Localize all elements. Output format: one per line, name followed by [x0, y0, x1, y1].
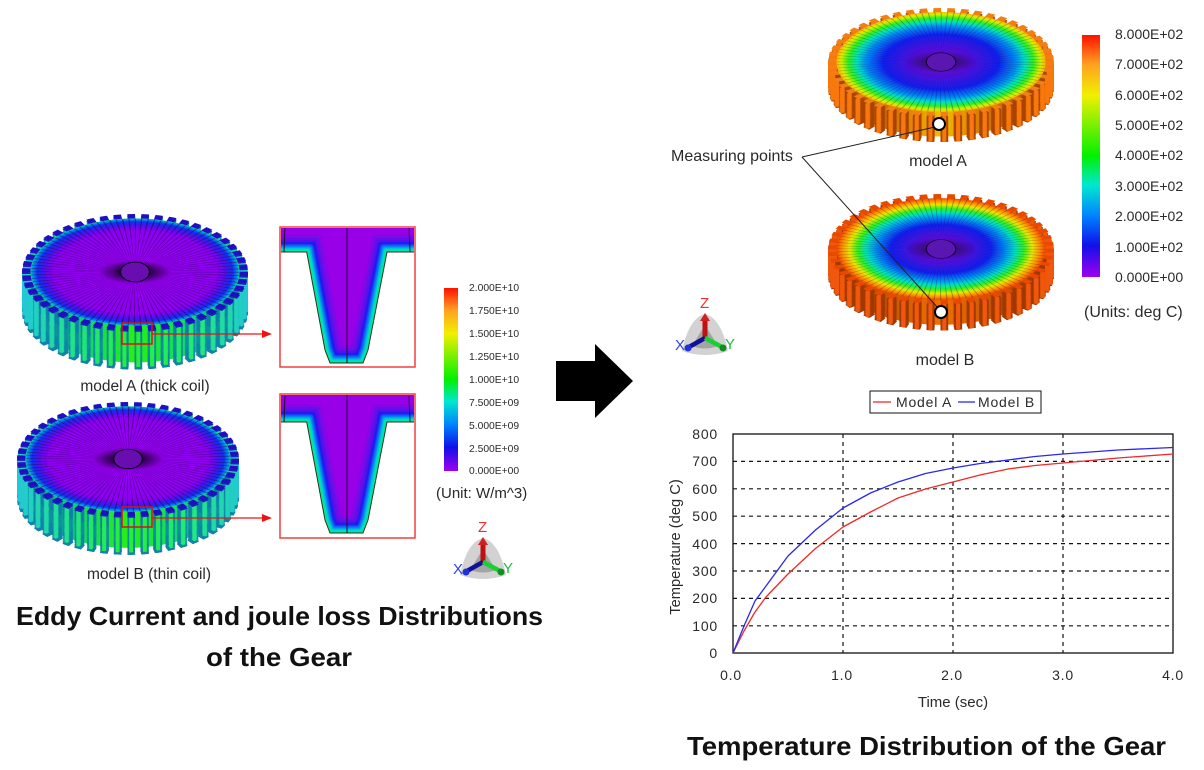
colour legend: joule loss: [436, 283, 527, 502]
colour legend: temperature: 1.000E+02: [1115, 239, 1183, 255]
curve: model B: [733, 448, 1173, 653]
detail panel: tooth model A: [279, 226, 416, 368]
y axis labels: 700: [692, 453, 718, 469]
x axis labels: 3.0: [1052, 667, 1074, 683]
measuring points callout: [671, 118, 947, 318]
y axis labels: 600: [692, 481, 718, 497]
label: model B: model B: [916, 352, 974, 369]
colour legend: joule loss: 1.250E+10: [469, 352, 519, 363]
label: model B thin coil: model B (thin coil): [87, 566, 211, 583]
colour legend: joule loss: 5.000E+09: [469, 421, 519, 432]
measuring points callout: Measuring points: [671, 148, 793, 165]
colour legend: temperature: 6.000E+02: [1115, 87, 1183, 103]
title: eddy current: of the Gear: [206, 642, 352, 672]
x axis labels: 0.0: [720, 667, 742, 683]
gear: model A temperature: [830, 10, 1052, 141]
chart legend: Model B: [978, 394, 1035, 410]
y axis labels: 300: [692, 563, 718, 579]
highlight box and arrow: model B: [122, 507, 272, 527]
x axis labels: 1.0: [831, 667, 853, 683]
colour legend: temperature: 5.000E+02: [1115, 117, 1183, 133]
axis triad: left: [453, 519, 513, 579]
title: eddy current: [16, 601, 543, 672]
detail panel: tooth model B: [279, 393, 416, 539]
colour legend: temperature: 2.000E+02: [1115, 208, 1183, 224]
chart legend: [870, 391, 1041, 413]
y axis labels: 200: [692, 590, 718, 606]
x axis labels: 4.0: [1162, 667, 1184, 683]
y axis labels: [692, 426, 718, 661]
colour legend: temperature: 4.000E+02: [1115, 147, 1183, 163]
colour legend: temperature: 7.000E+02: [1115, 56, 1183, 72]
gear: model B eddy current: [19, 404, 237, 552]
gear: model B temperature: [830, 196, 1052, 329]
colour legend: joule loss: (Unit: W/m^3): [436, 485, 527, 502]
label: model A: model A: [909, 153, 967, 170]
arrow: big black: [556, 344, 633, 418]
y axis labels: 500: [692, 508, 718, 524]
gear: model A eddy current: [24, 216, 246, 367]
colour legend: temperature: 8.000E+02: [1115, 26, 1183, 42]
y axis labels: 100: [692, 618, 718, 634]
line chart: temperature vs time: [668, 426, 1184, 711]
y axis labels: 800: [692, 426, 718, 442]
colour legend: joule loss: 2.000E+10: [469, 283, 519, 294]
colour legend: temperature: 0.000E+00: [1115, 269, 1183, 285]
colour legend: joule loss: 1.000E+10: [469, 375, 519, 386]
label: model A thick coil: model A (thick coil): [80, 378, 210, 395]
x axis labels: [720, 667, 1184, 683]
x axis labels: 2.0: [941, 667, 963, 683]
colour legend: temperature: 3.000E+02: [1115, 178, 1183, 194]
chart legend: Model A: [896, 394, 952, 410]
colour legend: temperature: [1082, 26, 1183, 321]
colour legend: joule loss: 7.500E+09: [469, 398, 519, 409]
colour legend: joule loss: 0.000E+00: [469, 466, 519, 477]
y axis labels: 400: [692, 536, 718, 552]
title: temperature distribution: Temperature Distribution of the Gear: [687, 731, 1166, 761]
title: eddy current: Eddy Current and joule loss Distributions: [16, 601, 543, 631]
x axis title: Time (sec): [918, 694, 988, 711]
axis triad: right: [675, 295, 735, 355]
colour legend: joule loss: 1.750E+10: [469, 306, 519, 317]
curve: model A: [733, 454, 1173, 653]
colour legend: joule loss: 1.500E+10: [469, 329, 519, 340]
y axis title: Temperature (deg C): [668, 479, 684, 615]
colour legend: joule loss: 2.500E+09: [469, 444, 519, 455]
y axis labels: 0: [709, 645, 718, 661]
highlight box and arrow: model A: [122, 323, 272, 344]
colour legend: temperature: (Units: deg C): [1084, 304, 1183, 321]
